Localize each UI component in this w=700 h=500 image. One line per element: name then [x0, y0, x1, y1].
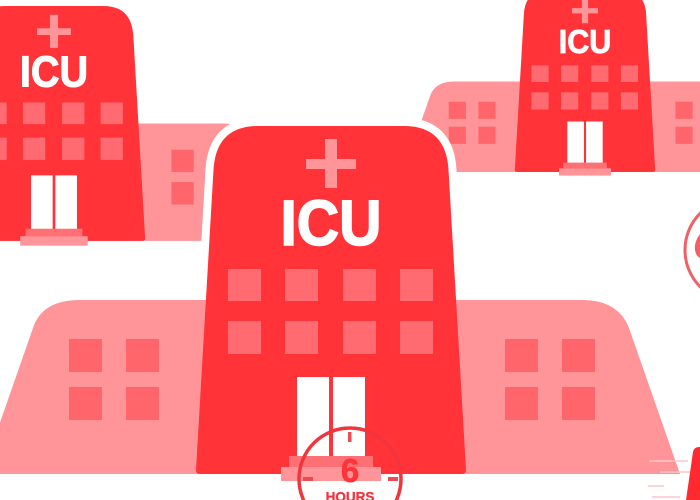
clock: 6 hours — [299, 428, 401, 500]
right hospital wing windows — [449, 102, 700, 144]
clock ring — [299, 428, 401, 500]
right hospital steps — [559, 163, 611, 176]
partial clock ring — [685, 198, 700, 302]
left hospital ICU label: ICU — [20, 48, 88, 96]
main hospital wing — [0, 300, 680, 474]
hospital: top right — [404, 0, 700, 176]
main hospital doors — [297, 377, 365, 457]
main hospital cross — [306, 139, 356, 188]
main hospital tower — [196, 126, 466, 474]
main hospital wing windows — [69, 339, 595, 420]
right hospital ICU label: ICU — [559, 24, 611, 61]
right hospital cross — [572, 0, 598, 23]
hospital: top left — [0, 6, 290, 246]
clock ticks — [303, 432, 398, 481]
main hospital steps — [281, 456, 381, 481]
left hospital tower windows — [0, 103, 123, 160]
left hospital wing windows — [171, 150, 232, 204]
speed lines: bottom right — [648, 461, 695, 497]
right hospital tower — [515, 0, 655, 172]
main hospital ICU label: ICU — [280, 187, 382, 259]
hospital: main centre — [0, 126, 680, 481]
left hospital cross — [37, 15, 71, 48]
clock number: 6 — [341, 452, 359, 489]
main hospital tower windows — [228, 269, 433, 354]
main hospital white outline — [196, 126, 466, 474]
right hospital wing — [404, 81, 700, 172]
left hospital tower — [0, 6, 145, 241]
right hospital tower windows — [531, 65, 638, 110]
partial clock icon: right edge — [685, 198, 700, 302]
right hospital doors — [567, 122, 603, 163]
partial red shape: bottom right — [686, 447, 700, 500]
left hospital steps — [20, 229, 88, 246]
left hospital doors — [31, 175, 77, 229]
left hospital wing — [0, 123, 290, 241]
partial clock number — [695, 234, 700, 258]
